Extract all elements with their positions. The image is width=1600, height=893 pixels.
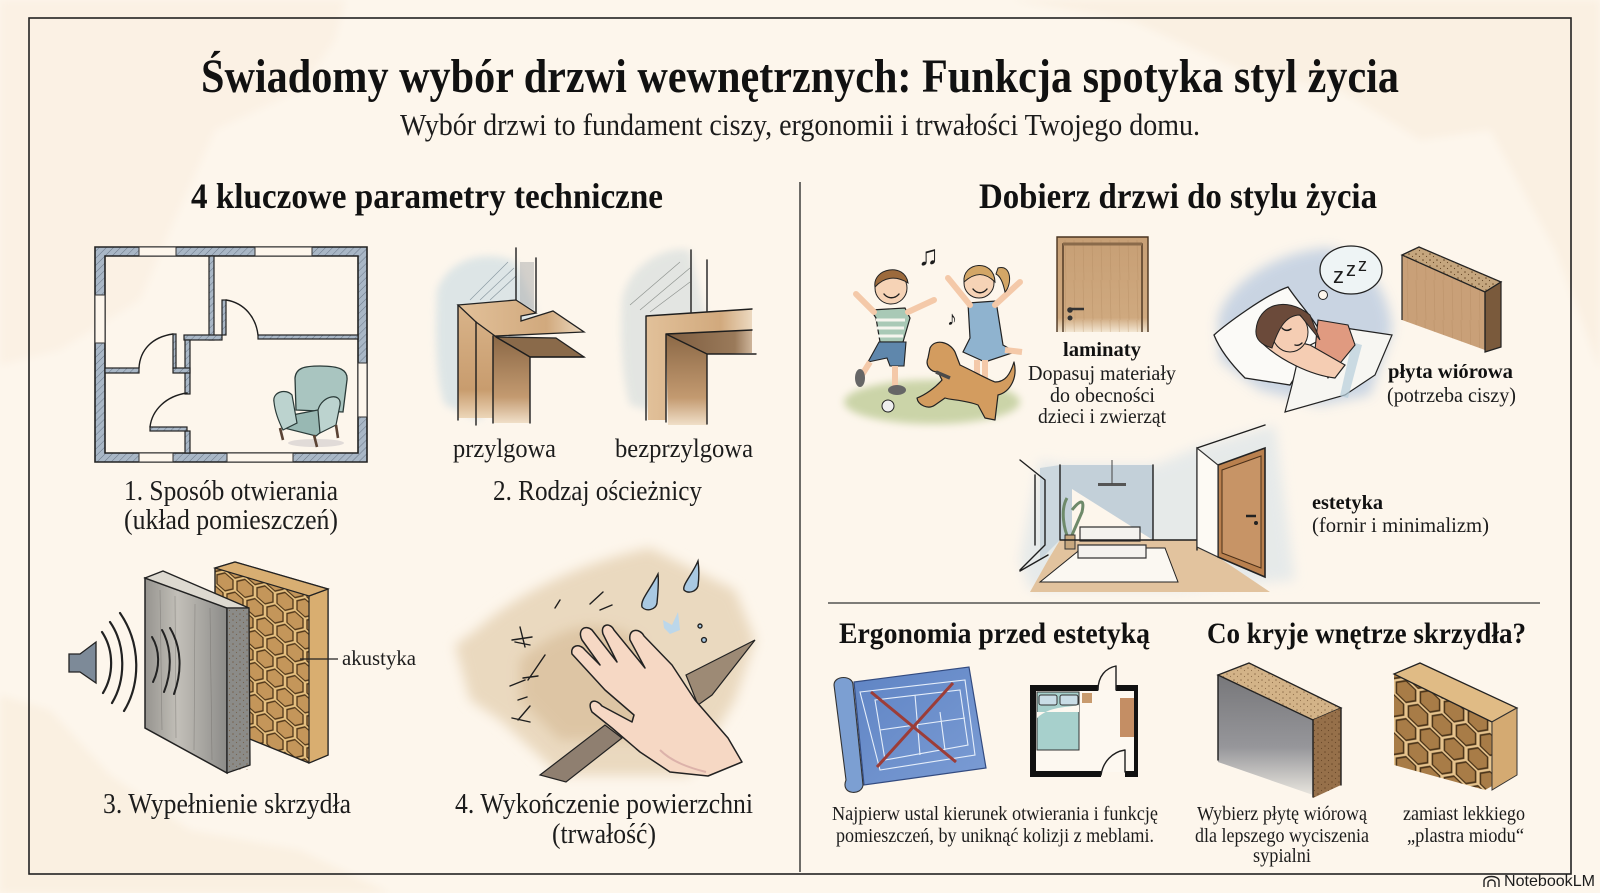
caption: chipboard: dla lepszego wyciszenia <box>1195 825 1369 847</box>
thought bubble <box>1318 246 1382 300</box>
horizontal divider <box>828 602 1540 604</box>
thought bubble: z <box>1346 259 1356 281</box>
frame illustration: przylgowa <box>436 248 584 425</box>
hand on scratched surface illustration <box>455 548 755 782</box>
label: parameter 2: 2. Rodzaj ościeżnicy <box>493 476 702 507</box>
solid door panel <box>145 571 250 773</box>
icon: chipboard core sample <box>1218 663 1341 798</box>
honeycomb door core <box>215 562 328 763</box>
icon: water drops <box>642 561 706 642</box>
caption: laminaty: laminaty <box>1063 339 1141 361</box>
label: parameter 4: (trwałość) <box>552 819 656 850</box>
caption: ergonomics: Najpierw ustal kierunek otwierania i funkcję <box>832 803 1158 825</box>
label: parameter 1: 1. Sposób otwierania <box>124 476 339 507</box>
icon: bedroom floor plan <box>1030 666 1138 777</box>
caption: chipboard: sypialni <box>1253 845 1311 867</box>
label: parameter 1: (układ pomieszczeń) <box>124 505 338 536</box>
caption: chipboard: Wybierz płytę wiórową <box>1197 803 1368 825</box>
caption: estetyka: estetyka <box>1312 492 1383 514</box>
label: akustyka <box>300 646 417 670</box>
label: parameter 4 <box>455 789 753 850</box>
subtitle: Wybór drzwi to fundament ciszy, ergonomii i trwałości Twojego domu. <box>400 107 1200 142</box>
panel: technical parameters <box>69 176 756 850</box>
heading: door core: Co kryje wnętrze skrzydła? <box>1207 617 1526 650</box>
title: Świadomy wybór drzwi wewnętrznych: Funkcja spotyka styl życia <box>201 49 1399 103</box>
caption: estetyka <box>1312 492 1489 537</box>
icon: laminate door <box>1057 237 1148 332</box>
caption: laminaty: Dopasuj materiały <box>1028 361 1176 385</box>
panel: ergonomics <box>832 617 1158 847</box>
panel: door core <box>1195 617 1526 867</box>
label: parameter 4: 4. Wykończenie powierzchni <box>455 789 753 820</box>
label: przylgowa: przylgowa <box>453 434 556 463</box>
label: bezprzylgowa: bezprzylgowa <box>615 434 753 463</box>
icon: armchair <box>274 366 347 447</box>
caption: płyta wiórowa: płyta wiórowa <box>1388 361 1513 383</box>
illustration: sleeping woman <box>1214 246 1392 412</box>
label: parameter 1 <box>124 476 339 536</box>
illustration: children and dog: ♫ <box>918 241 939 272</box>
illustration: children and dog <box>844 241 1022 424</box>
heading: parameters: 4 kluczowe parametry techniczne <box>191 176 663 216</box>
icon: chipboard door sample <box>1402 247 1501 352</box>
caption: honeycomb <box>1403 803 1525 847</box>
NotebookLM watermark: NotebookLM <box>1504 873 1595 890</box>
caption: laminaty: dzieci i zwierząt <box>1038 404 1166 428</box>
label: parameter 3: 3. Wypełnienie skrzydła <box>103 789 352 820</box>
caption: honeycomb: zamiast lekkiego <box>1403 803 1525 825</box>
caption: honeycomb: „plastra miodu“ <box>1407 825 1524 847</box>
illustration: children and dog: ♪ <box>947 308 957 330</box>
center vertical divider <box>799 182 801 872</box>
caption: płyta wiórowa: (potrzeba ciszy) <box>1387 383 1516 407</box>
caption: płyta wiórowa <box>1387 361 1516 407</box>
thought bubble: z <box>1333 263 1344 288</box>
caption: chipboard <box>1195 803 1369 867</box>
caption: ergonomics <box>832 803 1158 847</box>
illustration: minimalist interior <box>1020 425 1295 592</box>
frame illustration: bezprzylgowa <box>621 249 756 425</box>
floor plan illustration <box>95 247 367 462</box>
label: akustyka: akustyka <box>342 646 417 670</box>
caption: laminaty <box>1028 339 1176 428</box>
icon: speaker with sound waves <box>69 613 136 711</box>
icon: honeycomb core sample <box>1394 663 1517 790</box>
caption: estetyka: (fornir i minimalizm) <box>1312 513 1489 537</box>
panel: lifestyle <box>844 176 1516 592</box>
caption: laminaty: do obecności <box>1050 383 1155 407</box>
heading: ergonomics: Ergonomia przed estetyką <box>839 617 1150 650</box>
heading: lifestyle: Dobierz drzwi do stylu życia <box>979 176 1377 216</box>
thought bubble: z <box>1358 255 1367 275</box>
icon: crossed out blueprint <box>834 667 986 792</box>
caption: ergonomics: pomieszczeń, by uniknąć kolizji z meblami. <box>836 825 1154 847</box>
